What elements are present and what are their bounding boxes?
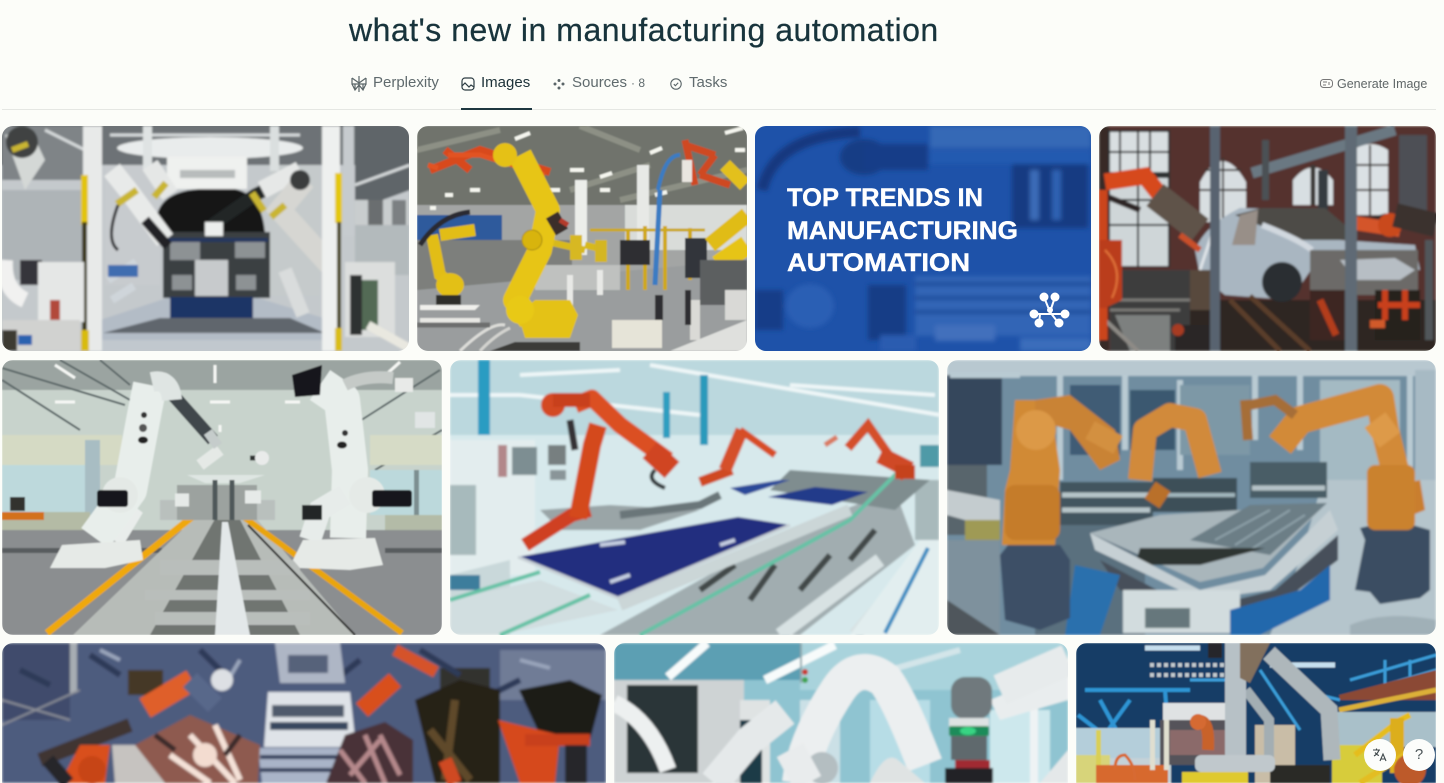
active tab underline xyxy=(461,108,532,110)
card headline: AUTOMATION xyxy=(787,249,970,277)
card headline xyxy=(787,184,1018,277)
photo: yellow robot arms in factory xyxy=(417,126,747,351)
tab: Tasks xyxy=(670,74,727,91)
tab: Sources: Sources xyxy=(572,74,627,91)
tab: Sources: · 8 xyxy=(631,76,645,90)
photo: white collaborative robot arms xyxy=(614,643,1068,783)
photo: car body with red robots in brick hall xyxy=(1099,126,1436,351)
help button xyxy=(1403,739,1435,771)
action: Generate Image: Generate Image xyxy=(1337,77,1427,91)
card headline: TOP TRENDS IN xyxy=(787,184,983,212)
card headline: MANUFACTURING xyxy=(787,217,1018,245)
tab: Tasks: Tasks xyxy=(689,74,727,91)
photo: white robots with conveyor and yellow lines xyxy=(2,360,442,635)
translate button xyxy=(1364,739,1396,771)
page title: what's new in manufacturing automation xyxy=(349,12,939,48)
tab: Perplexity: Perplexity xyxy=(373,74,439,91)
tab: Images: Images xyxy=(481,74,530,91)
photo: red robots welding car line xyxy=(2,643,606,783)
help button: ? xyxy=(1415,746,1423,763)
photo: red robots with solar panels xyxy=(450,360,939,635)
photo: blue-framed factory with silver ducts and orange robots xyxy=(1076,643,1436,783)
photo: white robots around black car body xyxy=(2,126,409,351)
card network logo xyxy=(1030,293,1069,327)
card: Top Trends in Manufacturing Automation xyxy=(755,126,1091,351)
photo: orange robots with EV battery xyxy=(947,360,1436,635)
tab: Sources xyxy=(554,74,645,91)
